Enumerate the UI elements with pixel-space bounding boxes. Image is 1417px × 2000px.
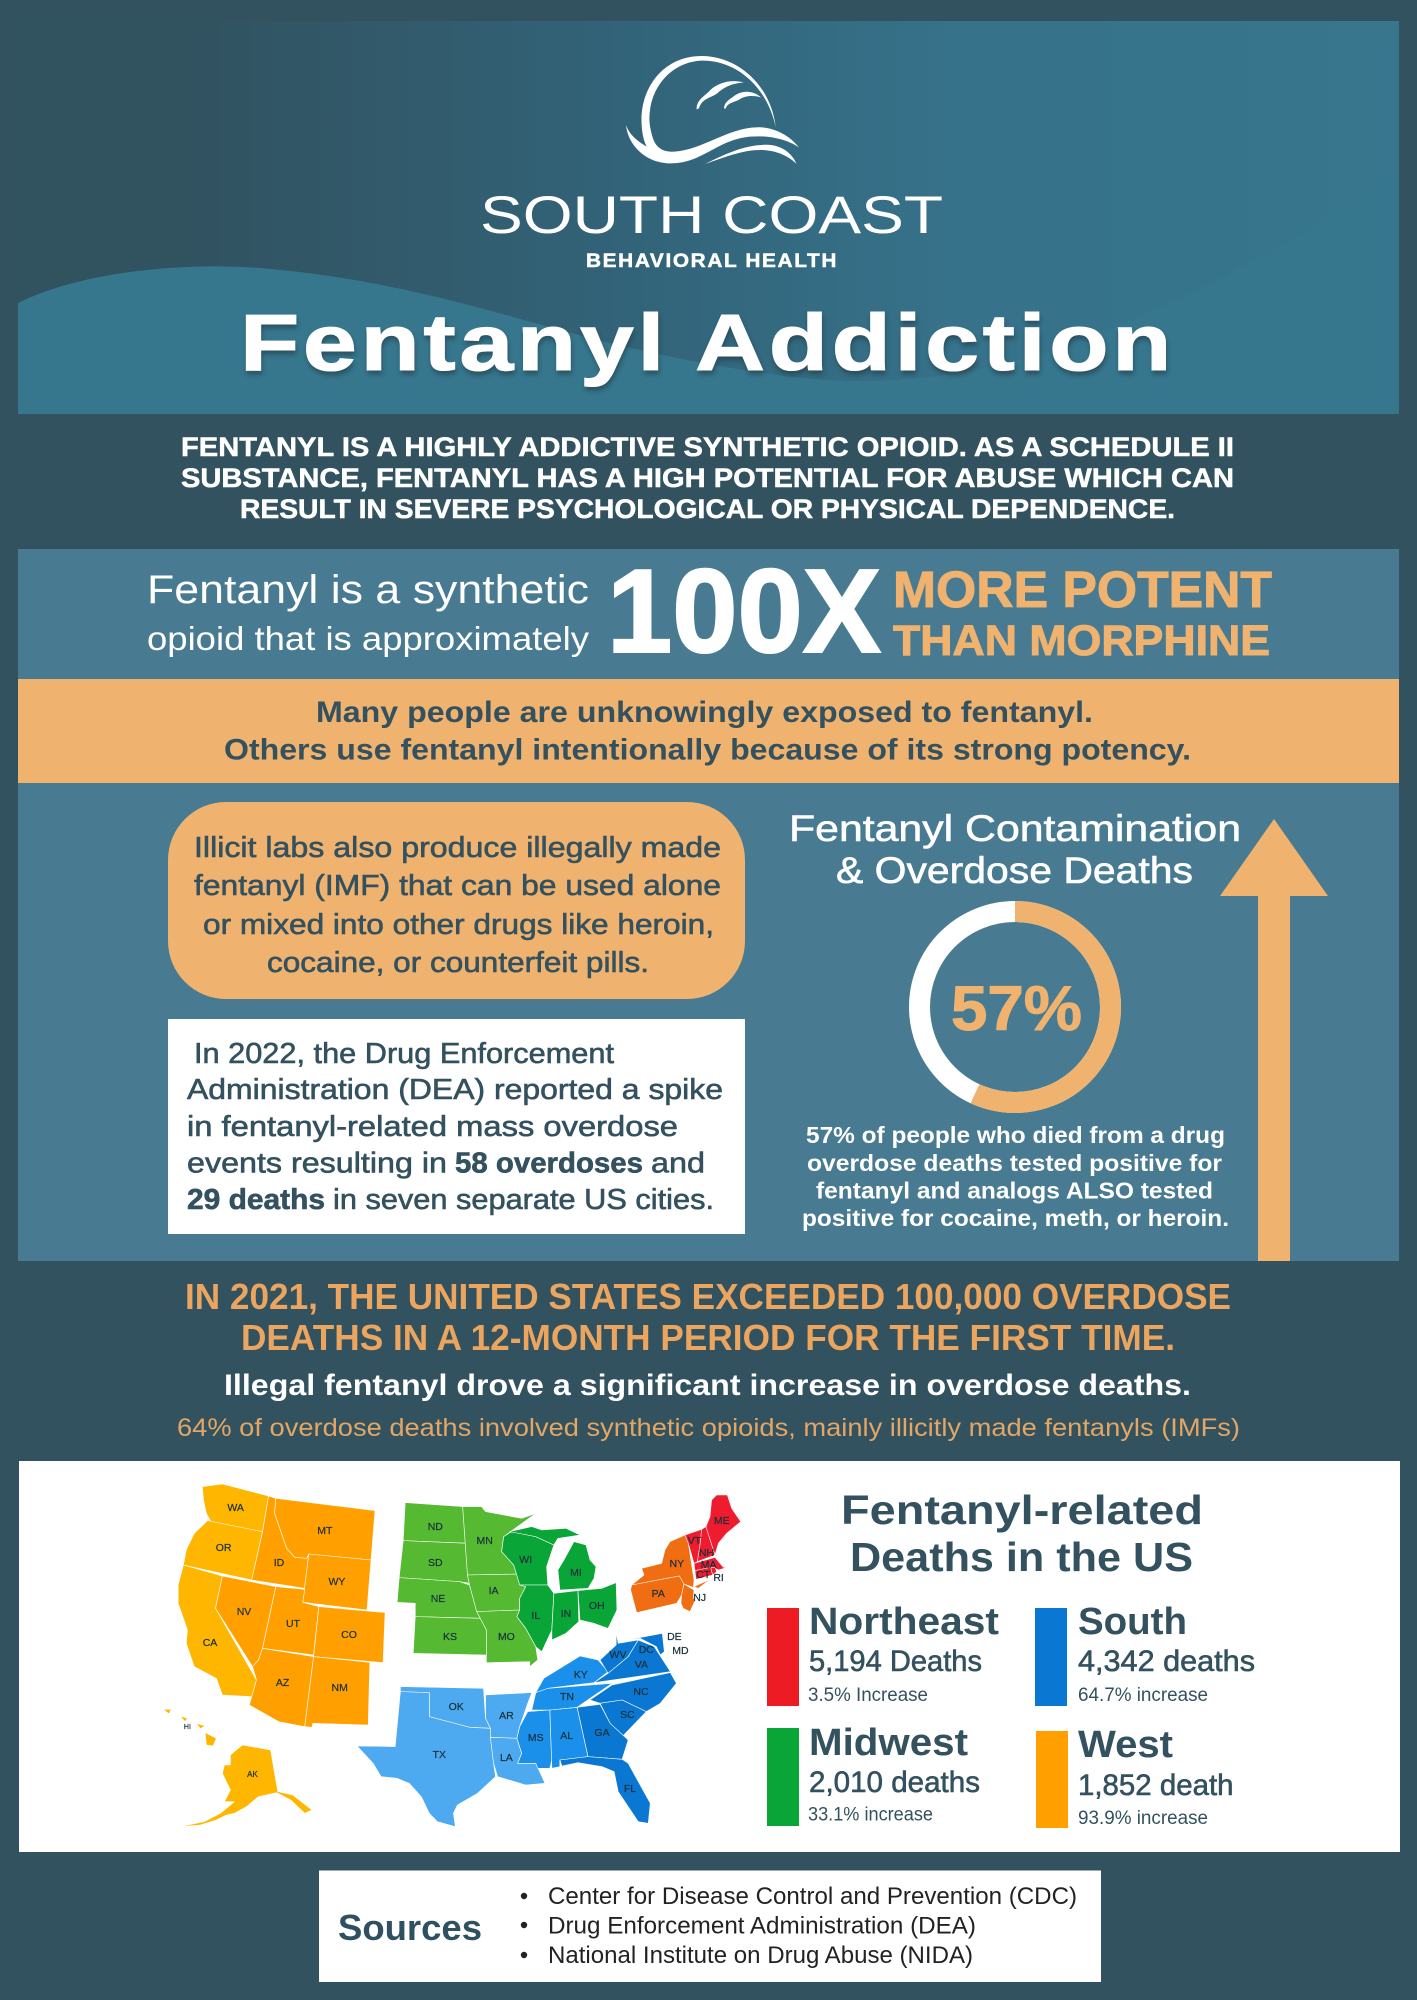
callout: DEA white box: in seven separate US cities. xyxy=(333,1184,714,1216)
legend: West xyxy=(1036,1724,1234,1829)
map: South region: AR xyxy=(499,1710,514,1722)
map: South region: MD xyxy=(672,1645,689,1657)
potency statement: 100X xyxy=(607,545,881,678)
legend: West: 1,852 death xyxy=(1078,1769,1234,1802)
map: Midwest region: ND xyxy=(428,1521,443,1533)
potency statement: THAN MORPHINE xyxy=(893,617,1270,665)
map: Midwest region xyxy=(397,1503,617,1667)
map: South region: OK xyxy=(449,1701,464,1713)
map: Northeast region: PA xyxy=(652,1588,665,1600)
map: Midwest region: IA xyxy=(489,1585,499,1597)
heading: contamination: Fentanyl Contamination xyxy=(789,808,1241,849)
map: South region: FL xyxy=(624,1783,636,1795)
map: Northeast region: NY xyxy=(670,1558,684,1570)
heading: contamination xyxy=(789,808,1241,891)
map: Midwest region: MN xyxy=(477,1535,493,1547)
panel: sources xyxy=(319,1870,1101,1982)
text block: 2021 overdose deaths: Illegal fentanyl drove a significant increase in overdose deaths. xyxy=(224,1369,1191,1402)
panel: potency and contamination xyxy=(18,545,1399,1261)
map: South region xyxy=(357,1631,689,1827)
legend: Northeast xyxy=(767,1601,999,1706)
legend: West: 93.9% increase xyxy=(1078,1808,1208,1829)
map: Midwest region: IN xyxy=(561,1608,571,1620)
legend: Northeast: Northeast xyxy=(809,1601,999,1643)
callout: DEA white box: In 2022, the Drug Enforcement xyxy=(194,1038,614,1070)
icon: South Coast logo mark xyxy=(626,56,799,164)
text block: 2021 overdose deaths: DEATHS IN A 12-MONTH PERIOD FOR THE FIRST TIME. xyxy=(241,1317,1175,1358)
sources heading: Sources xyxy=(338,1907,482,1948)
map: South region: DC xyxy=(639,1644,654,1656)
map: Midwest region: OH xyxy=(589,1600,605,1612)
map: West region: NM xyxy=(332,1682,348,1694)
legend: Midwest: Midwest xyxy=(809,1722,968,1764)
callout: DEA white box: 58 overdoses xyxy=(455,1148,643,1180)
text: 57% explanation xyxy=(802,1122,1229,1231)
legend: Northeast: 3.5% Increase xyxy=(808,1685,928,1706)
map: West region: UT xyxy=(286,1618,301,1630)
intro text block: SUBSTANCE, FENTANYL HAS A HIGH POTENTIAL FOR ABUSE WHICH CAN xyxy=(181,463,1234,493)
map: Northeast region: NJ xyxy=(693,1592,706,1604)
sources list: Center for Disease Control and Prevention (CDC) xyxy=(548,1883,1077,1910)
map: Midwest region: WI xyxy=(519,1554,532,1566)
map: Midwest region: KS xyxy=(443,1631,457,1643)
map: South region: WV xyxy=(610,1649,626,1661)
text: 57% explanation: 57% of people who died from a drug xyxy=(806,1122,1225,1148)
legend: Midwest xyxy=(767,1722,980,1826)
orange banner xyxy=(18,679,1399,783)
callout: illicit labs pill xyxy=(168,802,745,999)
map: Northeast region: MA xyxy=(701,1559,716,1571)
callout: illicit labs pill: Illicit labs also produce illegally made xyxy=(194,832,721,864)
callout: DEA white box: events resulting in xyxy=(187,1148,447,1180)
map: West region: OR xyxy=(216,1542,232,1554)
title: Fentanyl Addiction xyxy=(240,298,1175,387)
legend: Midwest: 2,010 deaths xyxy=(809,1766,980,1799)
donut chart: 57%: 57% xyxy=(951,974,1082,1044)
legend: South: 64.7% increase xyxy=(1078,1685,1208,1706)
map: West region xyxy=(163,1484,385,1827)
logo wordmark: SOUTH COAST xyxy=(480,186,943,245)
legend: South: 4,342 deaths xyxy=(1078,1645,1255,1678)
map: Northeast region: CT xyxy=(696,1569,711,1581)
potency statement: opioid that is approximately xyxy=(147,620,590,657)
orange banner: Others use fentanyl intentionally because of its strong potency. xyxy=(224,734,1191,766)
map: South region: DE xyxy=(667,1631,682,1643)
text: 57% explanation: fentanyl and analogs ALSO tested xyxy=(816,1178,1213,1204)
map: South region: NC xyxy=(633,1686,649,1698)
map: West region: WY xyxy=(328,1576,345,1588)
donut chart: 57% xyxy=(920,912,1111,1102)
map: West region: CA xyxy=(203,1637,217,1649)
callout: DEA white box: Administration (DEA) reported a spike xyxy=(187,1074,723,1106)
map: South region: SC xyxy=(620,1709,635,1721)
map: South region: KY xyxy=(574,1669,588,1681)
potency statement: Fentanyl is a synthetic xyxy=(147,568,589,612)
heading: fentanyl-related deaths xyxy=(841,1487,1203,1580)
map: Northeast region: VT xyxy=(688,1535,702,1547)
callout: DEA white box xyxy=(168,1019,745,1234)
map: Midwest region: SD xyxy=(428,1557,443,1569)
map: Midwest region: MO xyxy=(498,1631,515,1643)
map: West region: NV xyxy=(237,1606,251,1618)
heading: fentanyl-related deaths: Deaths in the US xyxy=(850,1534,1193,1580)
map: West region: CO xyxy=(341,1629,357,1641)
legend: West: West xyxy=(1078,1724,1173,1766)
map: Midwest region: MI xyxy=(570,1567,582,1579)
legend: Midwest: 33.1% increase xyxy=(808,1804,933,1826)
potency statement: MORE POTENT xyxy=(893,561,1272,618)
intro text block xyxy=(181,432,1234,524)
map: West region: AZ xyxy=(276,1677,290,1689)
potency statement xyxy=(147,545,1272,678)
text: 57% explanation: overdose deaths tested positive for xyxy=(807,1150,1222,1176)
map: Midwest region: NE xyxy=(431,1593,445,1605)
callout: illicit labs pill: fentanyl (IMF) that can be used alone xyxy=(194,870,721,902)
map: Midwest region: IL xyxy=(531,1610,540,1622)
map: South region: TN xyxy=(560,1691,574,1703)
map: South region: GA xyxy=(594,1727,610,1739)
legend: South: South xyxy=(1078,1601,1187,1643)
callout: illicit labs pill: or mixed into other drugs like heroin, xyxy=(203,909,714,941)
map: West region: AK xyxy=(247,1770,258,1779)
orange banner: Many people are unknowingly exposed to fentanyl. xyxy=(316,696,1093,729)
callout: DEA white box: 29 deaths xyxy=(187,1184,325,1216)
text: 57% explanation: positive for cocaine, meth, or heroin. xyxy=(802,1205,1229,1231)
sources list: Drug Enforcement Administration (DEA) xyxy=(548,1912,976,1940)
legend: South xyxy=(1035,1601,1255,1706)
heading: contamination: & Overdose Deaths xyxy=(836,850,1193,891)
map: West region: MT xyxy=(317,1525,333,1537)
map: South region: TX xyxy=(433,1749,446,1761)
map: South region: AL xyxy=(560,1730,573,1742)
callout: DEA white box: in fentanyl-related mass overdose xyxy=(187,1111,678,1143)
map: West region: HI xyxy=(184,1724,191,1731)
map: West region: ID xyxy=(274,1557,285,1569)
map: South region: MS xyxy=(528,1732,544,1744)
logo subtitle: BEHAVIORAL HEALTH xyxy=(586,251,838,272)
legend: Northeast: 5,194 Deaths xyxy=(809,1645,982,1678)
sources list: National Institute on Drug Abuse (NIDA) xyxy=(548,1942,973,1969)
map: South region: LA xyxy=(500,1752,513,1764)
callout: illicit labs pill: cocaine, or counterfeit pills. xyxy=(267,947,649,979)
map: South region: VA xyxy=(635,1659,648,1671)
intro text block: RESULT IN SEVERE PSYCHOLOGICAL OR PHYSICAL DEPENDENCE. xyxy=(240,494,1175,524)
map: Northeast region: ME xyxy=(714,1515,730,1527)
text block: 2021 overdose deaths: 64% of overdose deaths involved synthetic opioids, mainly illicitly made fentanyls (IMFs) xyxy=(177,1414,1240,1442)
map: Northeast region xyxy=(631,1495,741,1613)
text block: 2021 overdose deaths xyxy=(177,1276,1240,1442)
sources list xyxy=(521,1883,1077,1969)
map: Northeast region: RI xyxy=(713,1572,724,1584)
panel: US map and deaths xyxy=(19,1461,1400,1852)
callout: DEA white box: and xyxy=(651,1148,705,1180)
intro text block: FENTANYL IS A HIGHLY ADDICTIVE SYNTHETIC OPIOID. AS A SCHEDULE II xyxy=(181,432,1234,462)
map: West region: WA xyxy=(227,1502,244,1514)
map: Northeast region: NH xyxy=(699,1547,714,1559)
text block: 2021 overdose deaths: IN 2021, THE UNITED STATES EXCEEDED 100,000 OVERDOSE xyxy=(185,1276,1231,1317)
panel: header xyxy=(18,21,1399,414)
arrow: rising xyxy=(1220,819,1328,1261)
heading: fentanyl-related deaths: Fentanyl-related xyxy=(841,1487,1203,1533)
